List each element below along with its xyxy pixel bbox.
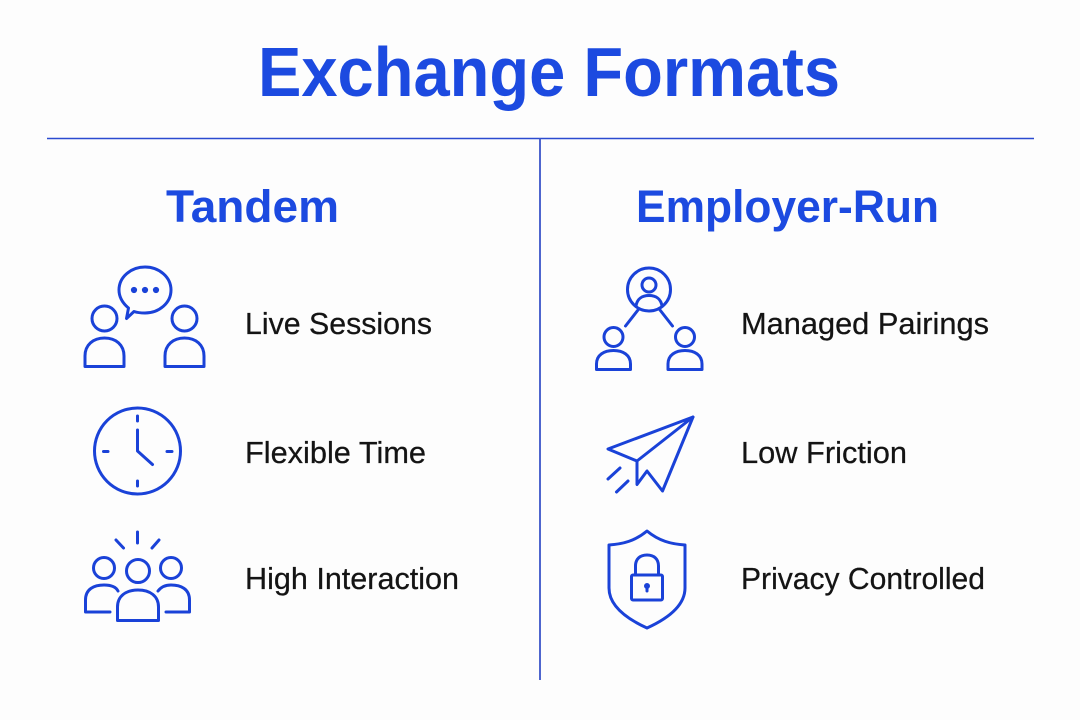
heading: Tandem: Tandem — [166, 181, 339, 232]
icon: managed pairings network — [596, 268, 702, 370]
panel: Employer-Run — [596, 181, 989, 628]
icon: clock — [94, 408, 180, 494]
label: Flexible Time: Flexible Time — [245, 435, 426, 470]
title: Exchange Formats — [258, 33, 840, 111]
icon: paper airplane — [608, 417, 693, 492]
panel: Tandem — [85, 181, 459, 620]
label: Live Sessions: Live Sessions — [245, 306, 432, 341]
label: High Interaction: High Interaction — [245, 561, 459, 596]
label: Privacy Controlled: Privacy Controlled — [741, 561, 985, 596]
label: Managed Pairings: Managed Pairings — [741, 306, 989, 341]
label: Low Friction: Low Friction — [741, 435, 907, 470]
heading: Employer-Run: Employer-Run — [636, 181, 939, 232]
icon: group with rays — [86, 532, 190, 620]
icon: two people with speech bubble — [85, 267, 204, 366]
icon: shield with padlock — [609, 531, 685, 628]
